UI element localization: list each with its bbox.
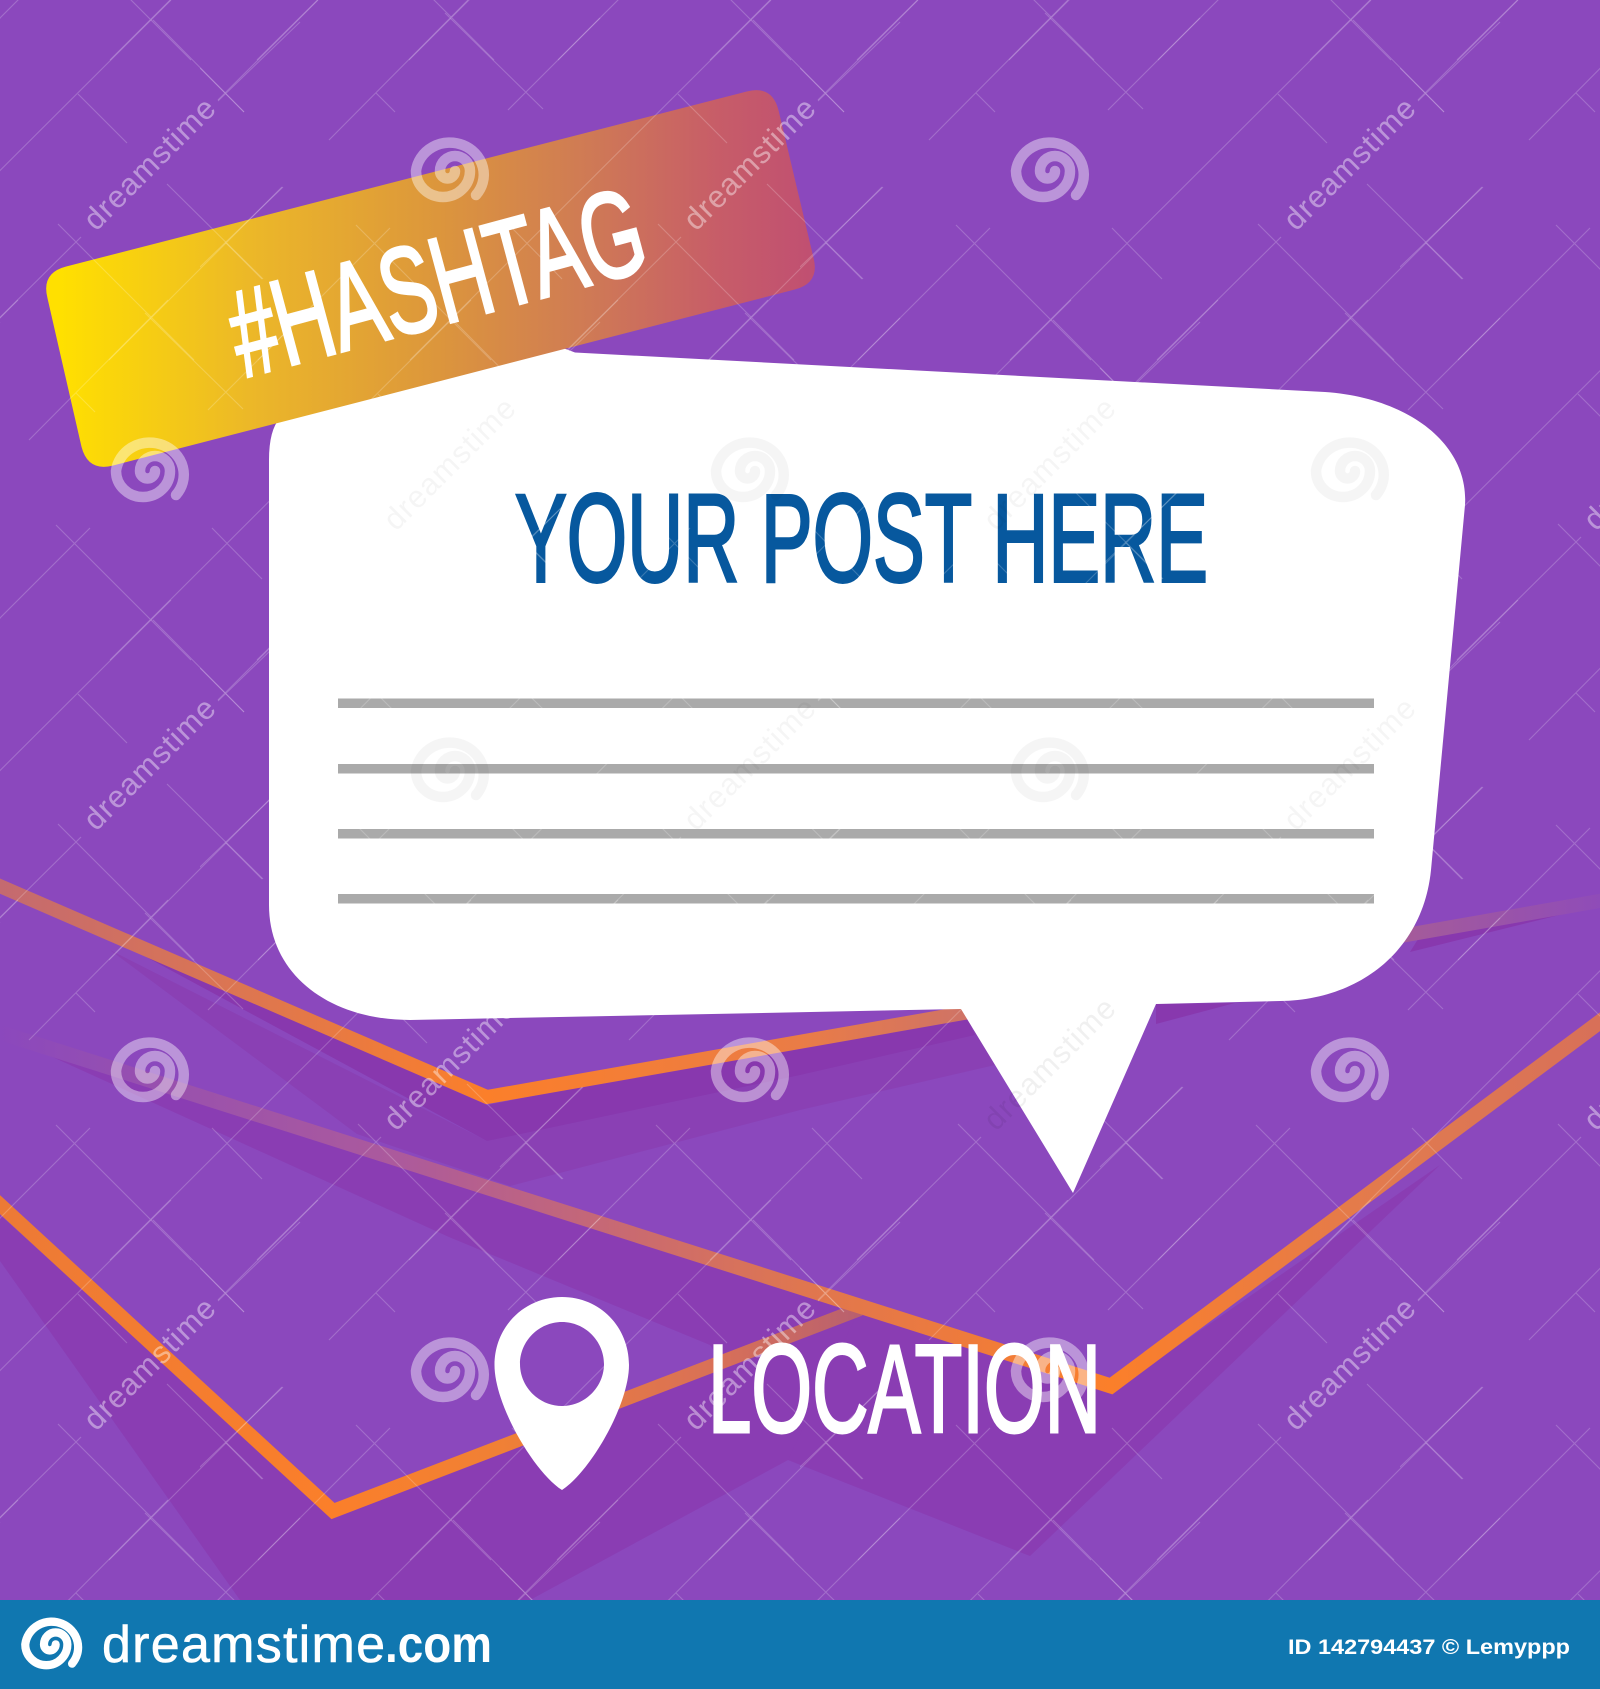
watermark wordmarks: dreamstime: [976, 391, 1123, 537]
watermark wordmarks: dreamstime: [1276, 1291, 1423, 1437]
watermark wordmarks: dreamstime: [376, 991, 523, 1137]
footer wordmark: dreamstime: [102, 1616, 385, 1674]
background shadows: [0, 890, 1600, 1600]
orange line: long right chevron: [0, 1018, 1600, 1386]
watermark wordmarks: dreamstime: [676, 91, 823, 237]
watermark wordmarks: [76, 91, 1600, 1437]
speech bubble: [269, 345, 1465, 1193]
watermark wordmarks: dreamstime: [676, 1291, 823, 1437]
text placeholder lines: [338, 698, 1374, 904]
footer wordmark: .com: [385, 1616, 492, 1674]
icon: location pin: [494, 1297, 629, 1490]
orange line: upper chevron: [0, 884, 1600, 1097]
icon: footer logo spiral: [25, 1622, 78, 1665]
orange line: bottom-left chevron: [0, 1200, 860, 1511]
watermark wordmarks: dreamstime: [76, 91, 223, 237]
hashtag label: [46, 90, 815, 467]
watermark wordmarks: dreamstime: [376, 391, 523, 537]
watermark wordmarks: dreamstime: [1276, 691, 1423, 837]
footer bar: [0, 1600, 1600, 1689]
watermark wordmarks: dreamstime: [976, 991, 1123, 1137]
image id and credit: ID 142794437 © Lemyppp: [1288, 1635, 1570, 1659]
watermark wordmarks: dreamstime: [1276, 91, 1423, 237]
post heading: YOUR POST HERE: [515, 470, 1208, 608]
watermark wordmarks: dreamstime: [76, 1291, 223, 1437]
watermark wordmarks: dreamstime: [676, 691, 823, 837]
faint watermark spirals on bubble: [416, 443, 1384, 797]
location label: LOCATION: [708, 1320, 1101, 1459]
watermark spirals: [116, 143, 1384, 1397]
watermark wordmarks: dreamstime: [76, 691, 223, 837]
hashtag text: #HASHTAG: [215, 162, 660, 404]
